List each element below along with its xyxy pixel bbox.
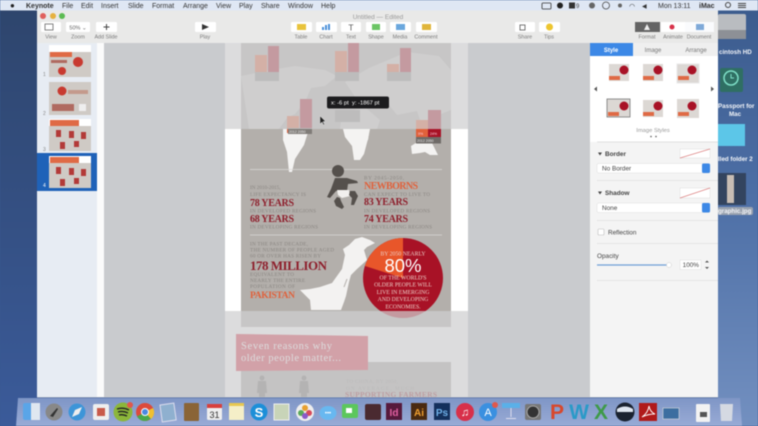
title bar and toolbar: Play [200,34,211,40]
pie chart: 80 percent: OLDER PEOPLE WILL [374,282,432,288]
bar charts: world regions [255,43,441,144]
title bar and toolbar: Tips [544,34,554,40]
InDesign icon: Id [390,408,398,419]
Pakistan map detail [330,256,347,287]
shadow control: None [602,205,618,212]
text: life expectancy now: IN 2010-2015, [250,185,281,191]
menu bar: Slide [128,3,144,10]
icon: baby [327,165,358,209]
Skype icon [250,404,268,420]
bar charts: world regions: 9% [418,132,423,136]
iTunes icon: ♫ [461,407,469,419]
title bar and toolbar: Share [518,34,532,40]
text: 178 million: NEARLY THE ENTIRE [250,278,305,284]
pie chart: 80 percent: ECONOMIES. [385,304,421,310]
title bar and toolbar: Untitled — Edited [353,14,404,21]
slide thumbnail 4 selected [49,156,91,188]
Illustrator icon [411,403,427,420]
menu bar: Help [321,3,336,10]
Photo Booth icon [365,404,381,420]
bar charts: world regions: 24% [430,132,437,136]
Keynote icon [502,403,520,419]
menu bar: 9 [576,4,580,10]
Mail icon [160,403,176,422]
title bar and toolbar: Chart [319,34,333,40]
Safari icon [68,404,86,420]
text: 178 million: POPULATION OF [250,284,295,290]
infographic panel [241,43,451,327]
iPhoto icon [663,408,679,419]
Finder icon [23,403,40,420]
text: 178 million [250,242,334,301]
desktop icons: right edge: Passport for [718,103,755,110]
title bar and toolbar: View [45,34,57,40]
text: life expectancy now: 78 YEARS [250,198,294,209]
desktop icons: right edge: Mac [729,111,742,118]
world map: on slide [283,129,438,172]
menu bar: View [216,3,232,10]
text: lower panel [345,379,437,399]
Trash icon [720,404,733,421]
slide navigator sidebar [37,43,104,397]
desktop icons: right edge: cintosh HD [719,49,752,56]
world map: above slide [241,52,451,129]
menu bar: iMac [699,3,715,10]
dim overlay below slide [225,311,468,397]
Messages icon: ••• [325,411,331,417]
Photoshop icon: Ps [436,408,449,419]
cursor [320,116,326,125]
Calendar icon: 31 [209,410,220,420]
text: life expectancy now: IN DEVELOPING REGIONS [250,224,318,230]
tabs: Style [604,48,619,54]
text: newborns projection [364,176,432,230]
menu bar: Mon 13:11 [658,3,691,10]
menu bar: Arrange [183,3,208,10]
menu bar: Keynote [26,3,54,10]
slide canvas with infographic [225,43,468,399]
shadow control: Shadow [605,190,630,197]
position tooltip: x: -6 pt y: -1867 pt [331,100,380,106]
tabs: Image [645,48,662,54]
title bar and toolbar: Text [346,34,356,40]
title bar and toolbar: Shape [368,34,384,40]
text: 178 million: 178 MILLION [250,258,328,273]
Excel icon: X [594,401,608,424]
menu bar: Edit [81,3,93,10]
menu bar: ◀ [642,4,647,10]
dock [16,398,742,426]
reflection control [597,229,718,244]
desktop icons: right edge: lled folder 2 [718,156,753,163]
reflection control: Reflection [608,230,637,236]
lower panel [241,362,451,397]
title bar and toolbar: Format [638,34,656,40]
text: newborns projection: BY 2045-2050, [364,176,404,182]
text: 178 million: PAKISTAN [250,291,295,301]
slide thumbnail 2 [49,82,91,115]
shadow control [597,188,718,220]
dividers [250,170,442,235]
text: 178 million: IN THE PAST DECADE, [250,242,308,248]
menu bar: Play [239,3,253,10]
title bar and toolbar: Table [295,34,307,40]
menu bar [0,0,758,10]
banner: seven reasons: Seven reasons why [241,341,333,352]
menu bar: Window [288,3,314,10]
title bar and toolbar: Animate [663,34,683,40]
opacity control: 100% [683,262,699,269]
slide thumbnail 3 [49,119,91,151]
desktop icons: right edge: graphic.jpg [718,208,752,215]
text: newborns projection: 74 YEARS [364,214,408,225]
App Store icon [479,402,498,421]
Skype icon: S [255,405,264,420]
text: newborns projection: 83 YEARS [364,197,408,208]
border control: No Border [602,166,632,172]
menu bar: Insert [101,3,119,10]
menu bar: ● [10,1,15,10]
text: 178 million: 60 OR OVER HAS RISEN BY [250,254,321,260]
downloads stack icon [696,404,710,422]
text: newborns projection: CAN EXPECT TO LIVE TO [364,192,430,198]
Messages icon [320,406,336,420]
tabs [590,43,718,56]
slide thumbnail 1 [49,45,91,77]
Preview icon [274,404,289,420]
PowerPoint icon: P [550,401,564,424]
map: Pakistan [300,237,375,310]
Photoshop icon [434,403,450,420]
bar charts: world regions: 2012 2050 [289,130,306,134]
App Store icon: A [484,407,492,419]
slide navigator sidebar: 1 [43,72,46,78]
title bar and toolbar: Media [393,34,407,40]
text: lower panel: TO CHINA, BY 2050, [346,379,398,385]
text: newborns projection: NEWBORNS [364,181,418,192]
image style thumbnails: Image Styles [636,128,670,134]
title bar and toolbar [37,10,718,43]
text: 178 million: EQUIVALENT TO [250,272,294,278]
banner: seven reasons [236,334,368,371]
text: newborns projection: IN DEVELOPING REGIONS [364,224,432,230]
text: life expectancy now [250,185,318,230]
bar charts: world regions: 2012 2050 [417,139,434,143]
format inspector panel [590,43,718,397]
border control: Border [605,151,626,158]
image style thumbnails [594,64,714,137]
System Preferences icon [525,404,541,420]
Contacts icon [184,403,199,421]
Sophos icon [616,402,634,422]
text: 178 million: THE NUMBER OF PEOPLE AGED [250,248,334,254]
Illustrator icon: Ai [414,408,424,419]
Word icon: W [569,401,589,424]
InDesign icon [386,403,402,420]
iTunes icon [456,403,474,421]
menu bar: Share [261,3,280,10]
Spotify icon [114,402,133,422]
desktop icons: right edge [718,14,755,215]
text: newborns projection: IN DEVELOPED REGIONS [364,208,430,214]
text: lower panel: SUPPORTING FARMERS [345,390,437,399]
pie chart: 80 percent: LIVE IN EMERGING [377,290,429,296]
Photos icon [296,403,314,421]
text: life expectancy now: IN DEVELOPED REGIONS [250,208,316,214]
Calendar icon [207,404,222,420]
title bar and toolbar: T [348,22,354,32]
dim overlay above slide [225,43,468,129]
title bar and toolbar: Zoom [71,34,85,40]
slide navigator sidebar: 2 [43,111,46,117]
menu bar: Format [152,3,174,10]
opacity control [597,253,718,280]
pie chart: 80 percent: BY 2050 NEARLY [380,252,426,258]
pie chart: 80 percent [363,238,443,318]
Launchpad icon [46,404,62,420]
menu bar: ◠ [629,4,635,10]
FaceTime icon [342,404,358,418]
Notes icon [229,403,244,420]
text: life expectancy now: 68 YEARS [250,214,294,225]
title bar and toolbar: Document [687,34,712,40]
opacity control: Opacity [597,253,619,260]
Reminders icon [93,404,109,420]
border control [597,142,718,180]
slide navigator sidebar: 3 [43,147,46,153]
Acrobat icon [639,403,657,421]
pie chart: 80 percent: 80% [384,255,422,276]
text: life expectancy now: LIFE EXPECTANCY IS [250,192,306,198]
text: lower panel: ON AVERAGE, MUCH [346,386,414,392]
title bar and toolbar: Comment [414,34,438,40]
title bar and toolbar: 50% ⌄ [69,26,87,32]
icons: older people figures [257,376,309,397]
pie chart: 80 percent: AND DEVELOPING [378,297,428,303]
title bar and toolbar: Add Slide [94,34,118,40]
menu bar: File [62,3,73,10]
Chrome icon [136,403,154,421]
tabs: Arrange [685,48,707,54]
banner: seven reasons: older people matter... [241,353,341,364]
slide navigator sidebar: 4 [43,183,46,189]
pie chart: 80 percent: OF THE WORLD'S [380,276,426,282]
position tooltip [327,96,389,108]
